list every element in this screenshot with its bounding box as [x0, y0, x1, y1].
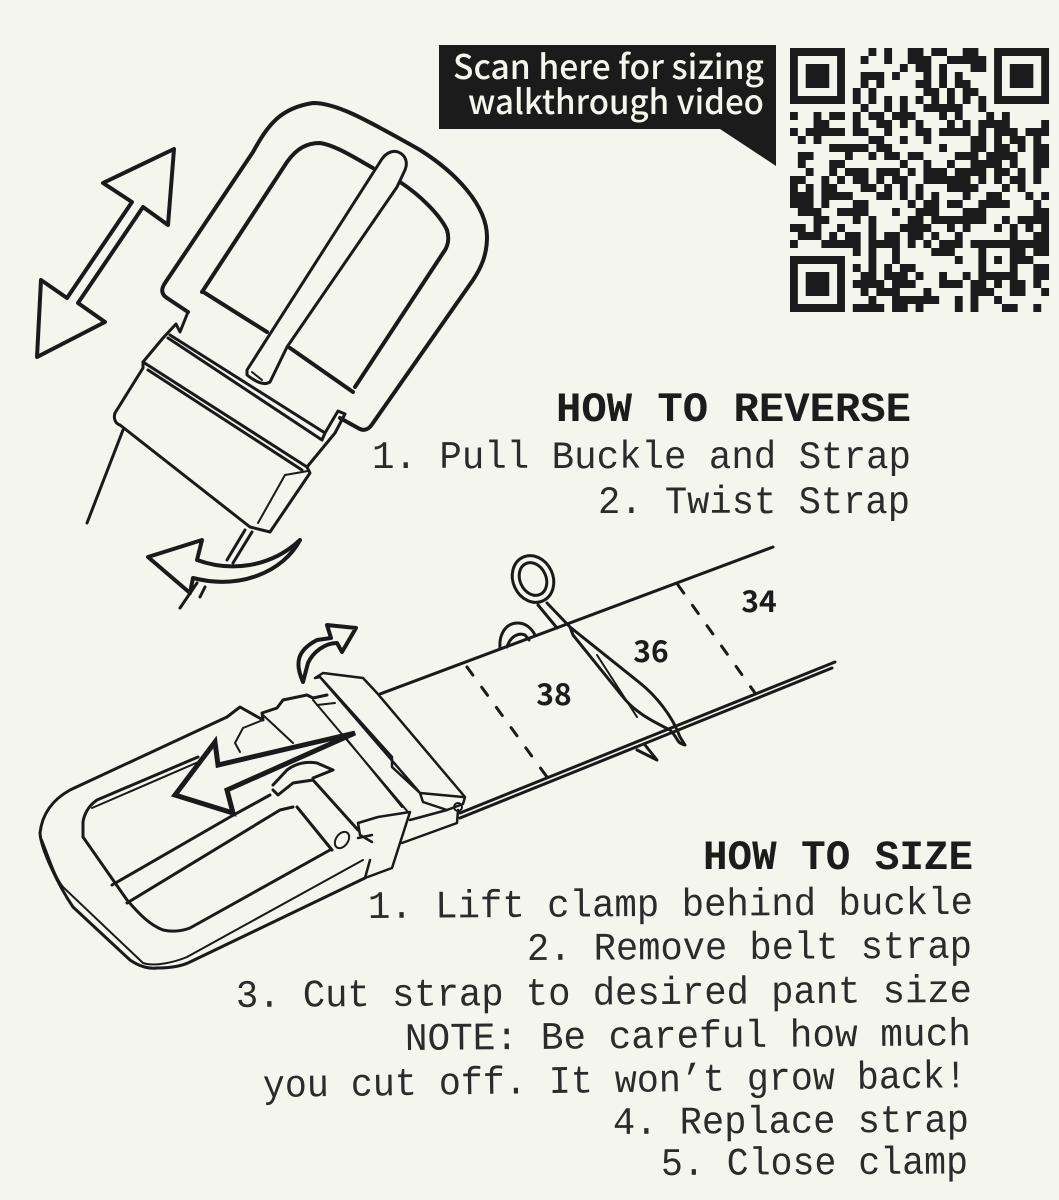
prong hinge	[273, 762, 358, 850]
buckle prong	[247, 151, 406, 384]
size label 36: 36	[633, 627, 669, 671]
strap edges	[380, 547, 835, 818]
strap in buckle	[112, 795, 293, 903]
text: size step 1: 1. Lift clamp behind buckle	[368, 882, 973, 930]
dashed cut line at 36	[678, 585, 755, 693]
text: size note line 2: you cut off. It won’t grow back!	[263, 1055, 967, 1109]
size label 38: 38	[536, 670, 572, 714]
strap tail	[87, 430, 252, 608]
strap edge behind buckle	[205, 293, 353, 392]
callout: scan here for sizing walkthrough video	[439, 40, 776, 166]
callout: scan here for sizing walkthrough video: Scan here for sizing	[453, 40, 764, 89]
text: size note line 1: NOTE: Be careful how much	[405, 1013, 971, 1062]
buckle frame inner edge	[83, 757, 330, 931]
buckle frame outer edge	[162, 103, 487, 430]
text: size step 3: 3. Cut strap to desired pant size	[236, 970, 972, 1019]
callout: scan here for sizing walkthrough video: walkthrough video	[468, 75, 764, 124]
icon: large pull-out arrow	[175, 733, 355, 813]
size label 34: 34	[741, 577, 777, 621]
buckle frame inner edge	[202, 143, 448, 387]
clamp	[143, 312, 345, 467]
text: reverse step 1: 1. Pull Buckle and Strap	[372, 436, 911, 480]
heading: how to size: HOW TO SIZE	[703, 834, 973, 882]
raised clamp	[315, 673, 465, 810]
icon: curved twist arrow	[148, 540, 300, 593]
illustration: buckle and strap, reverse view	[87, 103, 487, 608]
icon: lift arrow	[298, 625, 356, 682]
text: size step 2: 2. Remove belt strap	[527, 926, 972, 972]
buckle frame outer edge	[40, 695, 365, 968]
QR code	[790, 48, 1049, 312]
text: size step 4: 4. Replace strap	[613, 1100, 969, 1146]
icon: double-headed pull arrow	[37, 149, 174, 357]
heading: how to reverse: HOW TO REVERSE	[556, 386, 911, 434]
icon: scissors	[500, 549, 685, 760]
text: reverse step 2: 2. Twist Strap	[598, 481, 910, 525]
illustration: belt strap with cut lines	[380, 547, 835, 818]
dashed cut line at 38	[467, 667, 547, 777]
text: size step 5: 5. Close clamp	[661, 1141, 968, 1187]
illustration: buckle, sizing view	[40, 673, 465, 968]
